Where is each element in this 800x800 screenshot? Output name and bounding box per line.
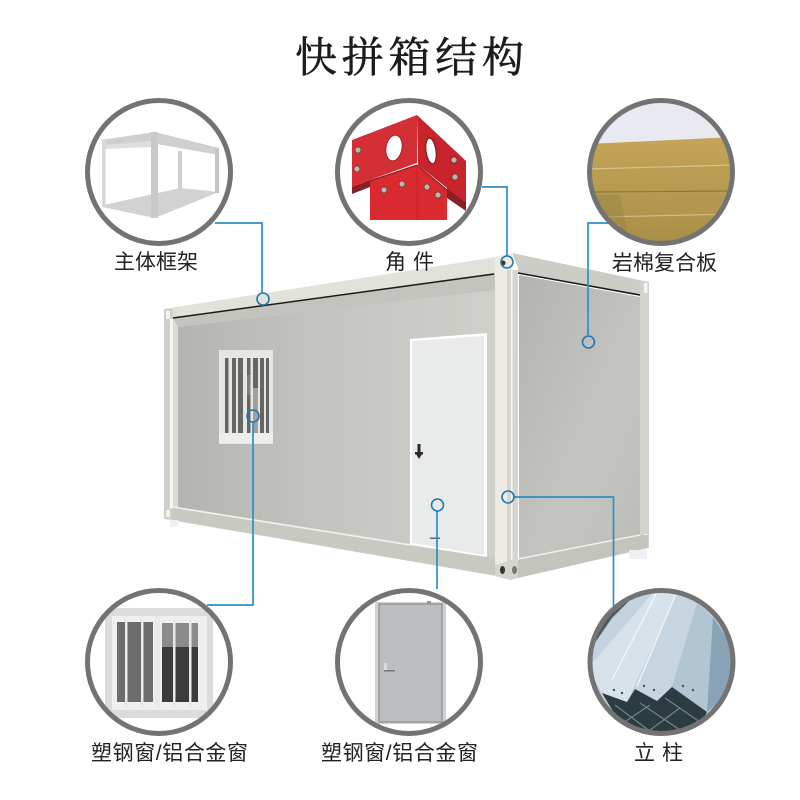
dark profile ends [602,687,707,731]
left wall panel [178,290,495,557]
icon: door photo [375,601,446,724]
flange 3 [672,603,713,712]
callout markers [247,256,594,511]
title: 快拼箱结构 [295,36,524,82]
roof shadow line left [173,274,494,318]
panel: corner fitting [338,100,480,274]
right underside [447,188,466,211]
flange 4 [707,617,730,712]
corner post [495,253,518,580]
panel: window [85,587,248,765]
label: 塑钢窗/铝合金窗 [91,742,248,765]
bottom beam left [172,507,497,576]
flange 2 [635,595,697,701]
icon: rock wool photo [592,103,730,241]
right wall panel [519,275,640,559]
panel: column [584,587,736,765]
flange 1 [588,593,677,702]
under-beam band [173,273,497,327]
panel: door [321,587,483,765]
left end post [164,309,173,519]
upper left face [352,115,417,187]
panel: rock wool composite board [587,98,735,275]
label: 角 件 [385,251,434,274]
dark sliver [595,601,629,642]
bottom beam right [518,535,648,578]
label: 立 柱 [634,742,683,765]
left underside [352,180,370,194]
door handle [415,444,423,459]
screws [354,147,458,198]
right end post [640,282,649,548]
icon: frame photo [101,132,219,218]
callout lines [207,187,614,606]
container building [164,253,649,580]
window [219,350,273,444]
icon: window photo [105,608,213,718]
right wall top beam [512,253,649,297]
icon: steel column photo [592,593,730,731]
top beam front [164,257,497,318]
door slot [430,538,440,539]
label: 主体框架 [114,251,198,274]
icon: corner fitting photo [352,115,466,220]
feet [170,520,647,559]
door [410,333,487,557]
panel: main frame [85,98,233,274]
label: 岩棉复合板 [612,252,717,275]
upper right face [417,115,466,205]
label: 塑钢窗/铝合金窗 [321,742,478,765]
left wall base [164,257,497,576]
lower block [370,165,447,220]
holes [385,134,403,162]
